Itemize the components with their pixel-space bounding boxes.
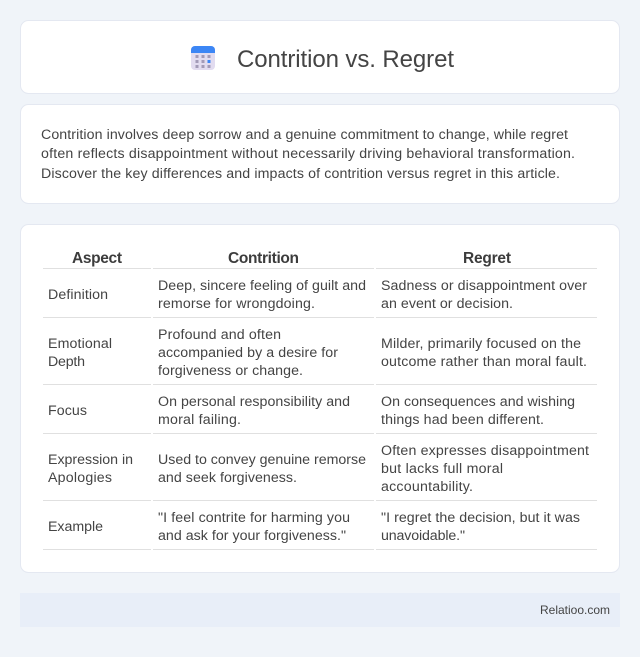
row: emotional depth: forgiveness or change. [158, 363, 303, 379]
row: emotional depth: outcome rather than moral fault. [381, 354, 587, 370]
row: expression in apologies: Often expresses disappointment [381, 443, 589, 459]
row: expression in apologies [48, 443, 589, 495]
row: expression in apologies: Used to convey genuine remorse [158, 452, 366, 468]
intro panel [20, 104, 620, 204]
row: expression in apologies: Expression in [48, 452, 133, 468]
table header: Aspect [72, 250, 122, 267]
row: focus: On personal responsibility and [158, 394, 350, 410]
row: definition: Deep, sincere feeling of guilt and [158, 278, 366, 294]
row: emotional depth [48, 327, 587, 379]
row: focus [48, 394, 575, 428]
row: focus: moral failing. [158, 412, 241, 428]
intro text: often reflects disappointment without necessarily driving behavioral transformation. [41, 146, 575, 162]
row: emotional depth: Emotional [48, 336, 112, 352]
row: expression in apologies: but lacks full moral [381, 461, 503, 477]
row: example: "I feel contrite for harming you [158, 510, 350, 526]
row: definition [48, 278, 587, 312]
row: definition: Sadness or disappointment over [381, 278, 587, 294]
row: example: unavoidable." [381, 528, 465, 544]
row: example: Example [48, 519, 103, 535]
row: emotional depth: Milder, primarily focused on the [381, 336, 581, 352]
row: definition: Definition [48, 287, 108, 303]
footer bar [20, 593, 620, 627]
table header: Contrition [228, 250, 299, 267]
footer credit: Relatioo.com [540, 603, 610, 617]
row: definition: an event or decision. [381, 296, 513, 312]
row: definition: remorse for wrongdoing. [158, 296, 315, 312]
row: focus: things had been different. [381, 412, 544, 428]
row: expression in apologies: accountability. [381, 479, 473, 495]
row: expression in apologies: and seek forgiveness. [158, 470, 297, 486]
row: expression in apologies: Apologies [48, 470, 112, 486]
icon: calendar [191, 46, 215, 70]
row: example [48, 510, 580, 544]
row: example: and ask for your forgiveness." [158, 528, 346, 544]
row: focus: On consequences and wishing [381, 394, 575, 410]
table header [72, 250, 511, 267]
row: emotional depth: accompanied by a desire for [158, 345, 338, 361]
row: emotional depth: Depth [48, 354, 85, 370]
table header: Regret [463, 250, 511, 267]
row: example: "I regret the decision, but it was [381, 510, 580, 526]
header panel [20, 20, 620, 94]
intro text: Discover the key differences and impacts of contrition versus regret in this article. [41, 166, 560, 182]
row: emotional depth: Profound and often [158, 327, 281, 343]
table panel [20, 224, 620, 572]
intro text [41, 127, 575, 182]
title: Contrition vs. Regret [237, 46, 454, 73]
row: focus: Focus [48, 403, 87, 419]
intro text: Contrition involves deep sorrow and a genuine commitment to change, while regret [41, 127, 568, 143]
